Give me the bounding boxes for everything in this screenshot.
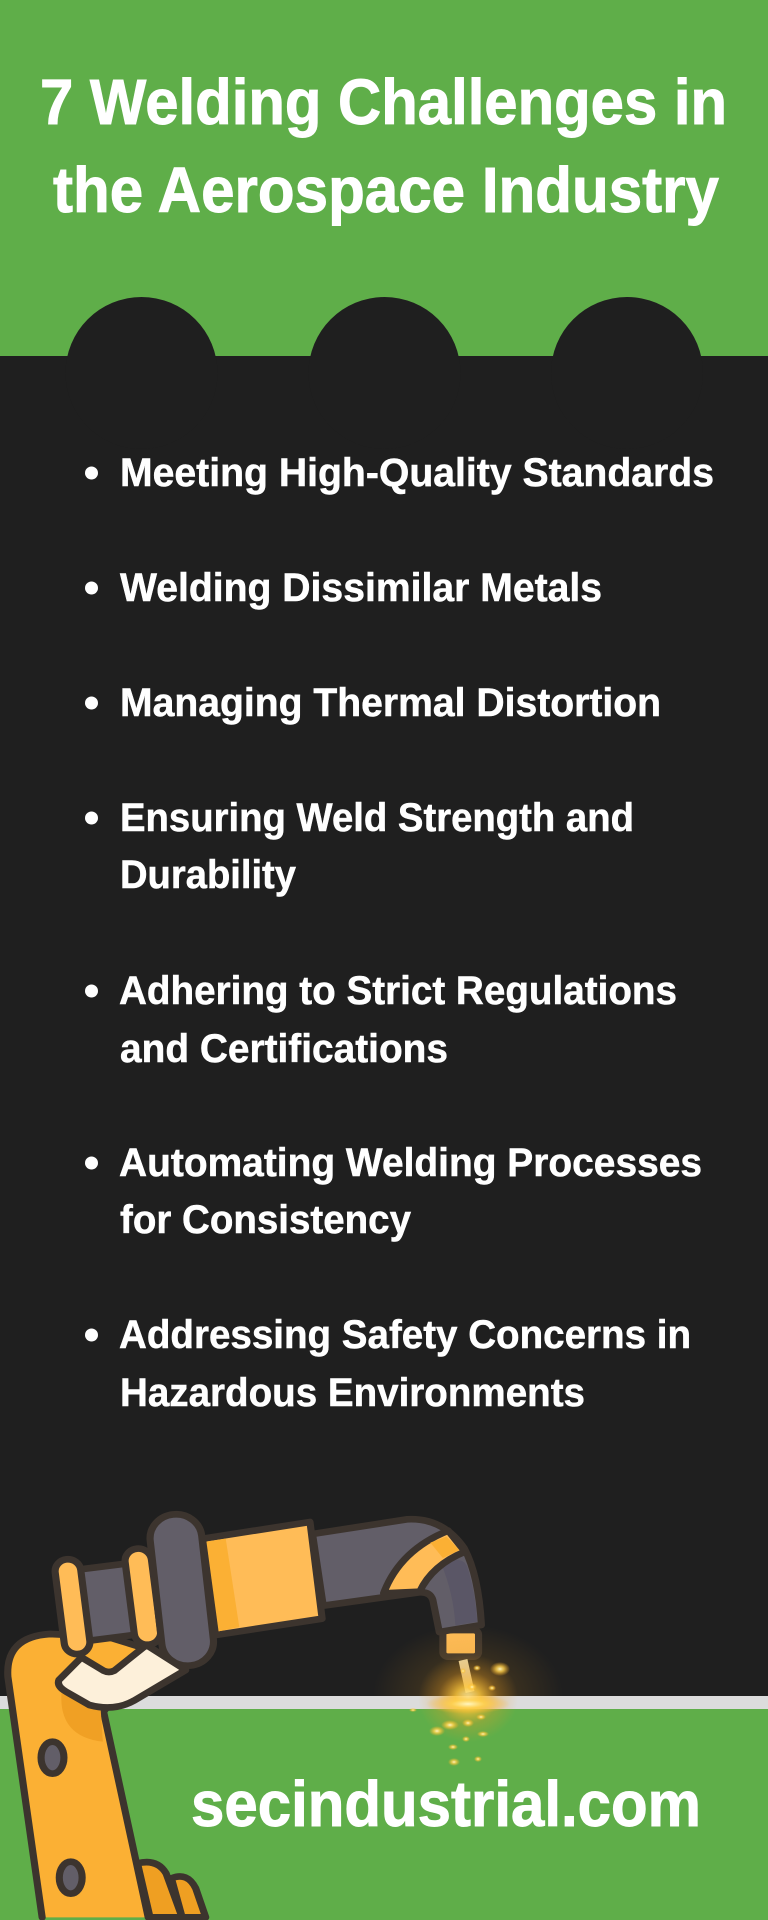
title: the Aerospace Industry (53, 154, 719, 226)
icon: robotic welding arm (8, 1512, 481, 1917)
grey connector (80, 1563, 141, 1641)
list item: Ensuring Weld Strength and Durability: Ensuring Weld Strength and (120, 796, 634, 840)
list item: Welding Dissimilar Metals: Welding Dissimilar Metals (120, 566, 602, 610)
list item: Ensuring Weld Strength and Durability: Durability (120, 853, 297, 897)
footer website text: secindustrial.com (191, 1768, 701, 1840)
footer panel (0, 1709, 768, 1920)
decorative domes (66, 297, 703, 449)
list item: Adhering to Strict Regulations and Certifications: and Certifications (120, 1027, 448, 1071)
list item: Meeting High-Quality Standards: Meeting High-Quality Standards (120, 451, 714, 495)
list item: Managing Thermal Distortion: Managing Thermal Distortion (120, 681, 661, 725)
white bracket (58, 1645, 186, 1708)
grey shoulder joint (148, 1512, 216, 1668)
grey work surface strip (0, 1696, 768, 1709)
title: 7 Welding Challenges in (40, 66, 727, 138)
header panel (0, 0, 768, 356)
list item: Automating Welding Processes for Consistency: Automating Welding Processes (119, 1141, 702, 1185)
list item: Adhering to Strict Regulations and Certifications (85, 969, 677, 1071)
orange elbow band (384, 1531, 465, 1593)
list item: Addressing Safety Concerns in Hazardous Environments: Addressing Safety Concerns in (119, 1313, 691, 1357)
list item: Addressing Safety Concerns in Hazardous Environments: Hazardous Environments (120, 1371, 585, 1415)
orange arm section (203, 1522, 322, 1635)
arm feet (137, 1862, 206, 1917)
list item: Automating Welding Processes for Consistency: for Consistency (120, 1198, 412, 1242)
list item: Addressing Safety Concerns in Hazardous Environments (85, 1313, 691, 1415)
title (40, 66, 727, 226)
welding nozzle (443, 1630, 479, 1657)
collar ring left (54, 1558, 91, 1655)
list item: Automating Welding Processes for Consistency (85, 1141, 702, 1242)
collar ring right (124, 1547, 162, 1646)
grey elbow (312, 1519, 481, 1632)
welding spark glow (388, 1638, 548, 1766)
list item: Adhering to Strict Regulations and Certifications: Adhering to Strict Regulations (119, 969, 677, 1013)
main arm column (8, 1634, 150, 1917)
dark content panel (0, 356, 768, 1696)
list item: Ensuring Weld Strength and Durability (85, 796, 634, 897)
